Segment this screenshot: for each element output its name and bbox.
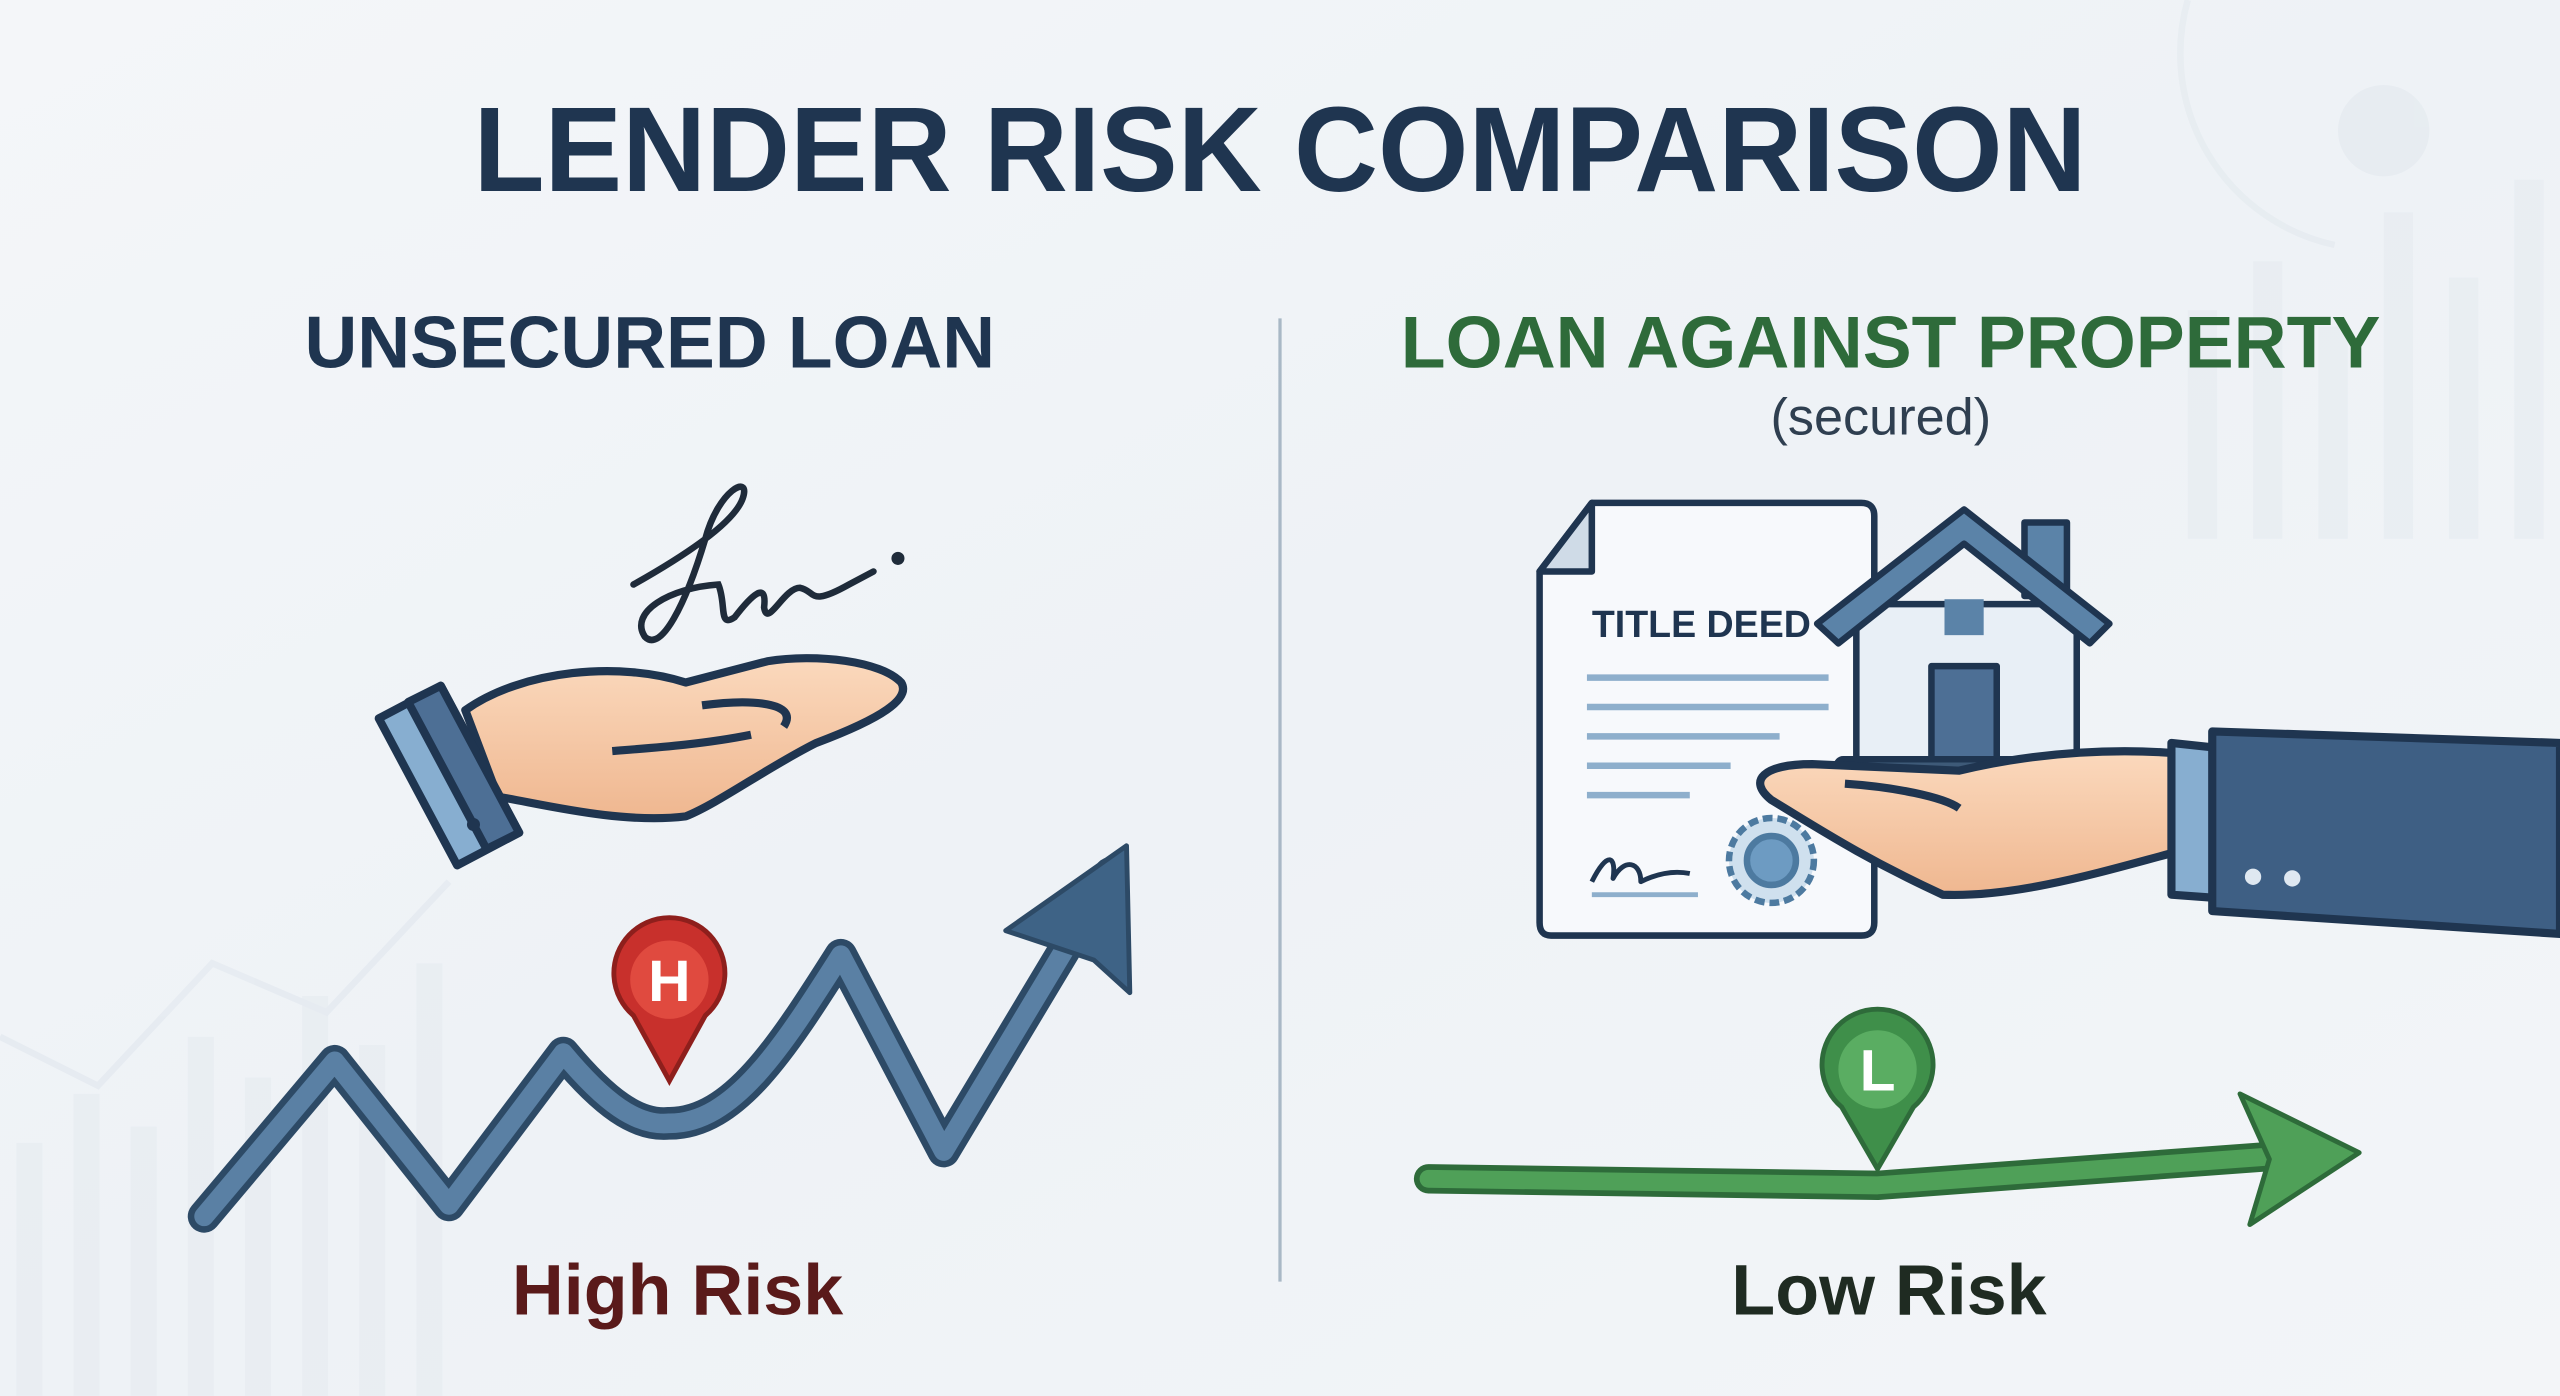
icon: pin H xyxy=(614,918,725,1081)
heading: unsecured loan: UNSECURED LOAN xyxy=(304,300,995,383)
icon: house xyxy=(1817,509,2109,782)
icon: pin L xyxy=(1822,1009,1933,1169)
label: high risk: High Risk xyxy=(512,1250,844,1330)
chart: low risk arrow xyxy=(1429,1094,2359,1225)
icon: signature xyxy=(633,487,901,640)
icon: pin H: H xyxy=(648,949,691,1014)
icon: title deed xyxy=(1540,503,1874,936)
chart: high risk zigzag arrow xyxy=(204,846,1130,1216)
heading: loan against property: LOAN AGAINST PROPERTY xyxy=(1401,300,2380,383)
icon: open hand (unsecured) xyxy=(379,658,903,865)
icon: title deed: TITLE DEED xyxy=(1592,603,1811,645)
label: low risk: Low Risk xyxy=(1731,1250,2048,1330)
icon: hand with sleeve (secured) xyxy=(1760,731,2560,934)
title: LENDER RISK COMPARISON xyxy=(473,82,2087,217)
icon: pin L: L xyxy=(1860,1039,1896,1104)
subheading: secured: (secured) xyxy=(1771,388,1991,446)
